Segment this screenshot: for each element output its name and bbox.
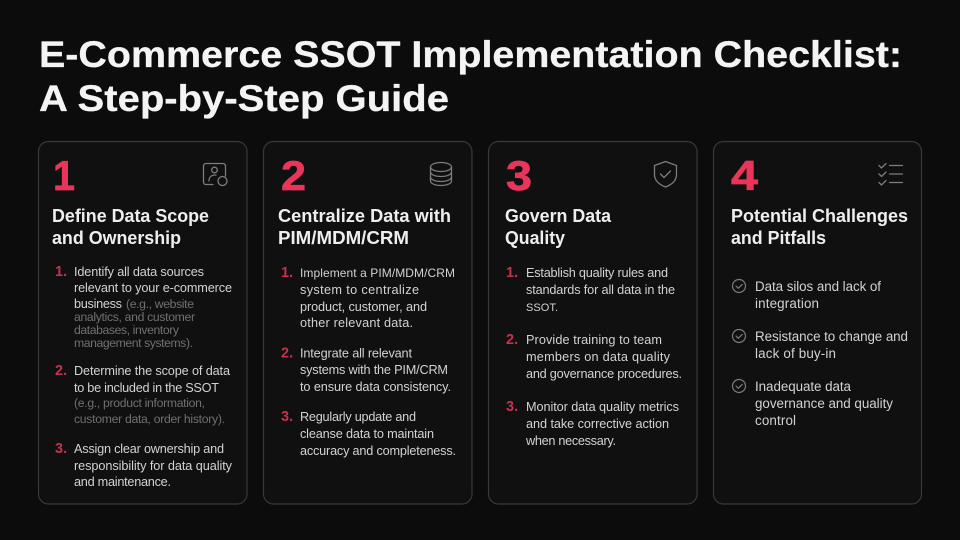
list item 2: 2. xyxy=(55,363,67,379)
list item 3: responsibility for data quality xyxy=(74,459,233,473)
list item 2: Integrate all relevant xyxy=(300,346,412,360)
list item 3: Regularly update and xyxy=(300,410,416,424)
list item 2: Determine the scope of data xyxy=(74,364,231,378)
heading xyxy=(52,205,209,248)
list item 2: 2. xyxy=(281,346,293,362)
list item 2: to ensure data consistency. xyxy=(300,380,451,394)
list item 3: 3. xyxy=(506,399,518,415)
step number 4: 4 xyxy=(731,152,759,199)
challenge 2: lack of buy-in xyxy=(755,346,836,361)
list item 3: 3. xyxy=(55,441,67,457)
challenge 3: Inadequate data xyxy=(755,379,852,394)
list item 1 xyxy=(55,264,232,350)
list item 1 xyxy=(506,265,675,314)
list item 3: 3. xyxy=(281,409,293,425)
challenge 1 xyxy=(732,279,881,311)
list item 1: 1. xyxy=(506,265,518,281)
list item 1: business xyxy=(74,297,122,311)
panel: step 1 define data scope xyxy=(38,142,247,504)
heading: Govern Data xyxy=(505,205,612,226)
list item 2: (e.g., product information, xyxy=(74,396,205,410)
list item 2 xyxy=(55,363,231,426)
list item 2: members on data quality xyxy=(526,350,671,364)
icon: shield check xyxy=(654,162,676,187)
heading: and Ownership xyxy=(52,227,181,248)
list item 1: (e.g., website xyxy=(126,297,194,311)
list item 3 xyxy=(55,441,233,489)
list item 1: relevant to your e-commerce xyxy=(74,281,232,295)
list item 2 xyxy=(506,332,682,381)
challenge 3: control xyxy=(755,413,796,428)
list item 3: and take corrective action xyxy=(526,417,669,431)
title: E-Commerce SSOT Implementation Checklist: xyxy=(39,33,902,75)
icon: user profile xyxy=(204,164,227,186)
list item 3: Monitor data quality metrics xyxy=(526,400,679,414)
list item 1: product, customer, and xyxy=(300,300,427,314)
challenge 2: Resistance to change and xyxy=(755,329,908,344)
list item 3 xyxy=(506,399,679,448)
title: A Step-by-Step Guide xyxy=(39,77,449,119)
list item 1: system to centralize xyxy=(300,283,419,297)
list item 3 xyxy=(281,409,456,458)
list item 2: to be included in the SSOT xyxy=(74,381,219,395)
panel: step 2 centralize data xyxy=(264,142,472,504)
list item 3: cleanse data to maintain xyxy=(300,427,434,441)
list item 1 xyxy=(281,265,455,330)
icon: database xyxy=(430,162,452,186)
list item 3: accuracy and completeness. xyxy=(300,444,456,458)
challenge 3 xyxy=(732,379,893,428)
list item 2: Provide training to team xyxy=(526,333,662,347)
challenge 2 xyxy=(732,329,908,361)
heading: Define Data Scope xyxy=(52,205,209,226)
list item 3: when necessary. xyxy=(525,434,616,448)
list item 1: 1. xyxy=(281,265,293,281)
list item 1: Implement a PIM/MDM/CRM xyxy=(300,266,455,280)
heading xyxy=(278,205,451,248)
list item 2: 2. xyxy=(506,332,518,348)
list item 1: other relevant data. xyxy=(300,316,413,330)
heading: Potential Challenges xyxy=(731,205,908,226)
list item 1: Identify all data sources xyxy=(74,265,204,279)
list item 3: Assign clear ownership and xyxy=(74,442,224,456)
list item 1: management systems). xyxy=(74,336,193,350)
heading: Quality xyxy=(505,227,566,248)
heading: and Pitfalls xyxy=(731,227,826,248)
challenge 1: Data silos and lack of xyxy=(755,279,881,294)
list item 3: and maintenance. xyxy=(74,475,171,489)
panel: step 3 govern data quality xyxy=(488,142,697,504)
heading xyxy=(731,205,908,248)
list item 1: Establish quality rules and xyxy=(526,266,668,280)
heading: PIM/MDM/CRM xyxy=(278,227,409,248)
title xyxy=(39,33,902,119)
heading xyxy=(505,205,612,248)
list item 1: 1. xyxy=(55,264,67,280)
list item 1: SSOT. xyxy=(526,302,558,314)
step number 1: 1 xyxy=(53,152,75,199)
list item 2 xyxy=(281,346,451,394)
challenge 1: integration xyxy=(755,296,819,311)
step number 2: 2 xyxy=(281,152,306,199)
challenge 3: governance and quality xyxy=(755,396,893,411)
list item 1: databases, inventory xyxy=(74,323,180,337)
icon: checklist xyxy=(879,164,902,185)
panel: step 4 challenges and pitfalls xyxy=(714,142,922,504)
list item 1: analytics, and customer xyxy=(74,310,195,324)
list item 2: systems with the PIM/CRM xyxy=(300,363,448,377)
heading: Centralize Data with xyxy=(278,205,451,226)
list item 2: customer data, order history). xyxy=(74,412,225,426)
list item 2: and governance procedures. xyxy=(526,367,682,381)
list item 1: standards for all data in the xyxy=(526,283,675,297)
step number 3: 3 xyxy=(506,152,532,199)
